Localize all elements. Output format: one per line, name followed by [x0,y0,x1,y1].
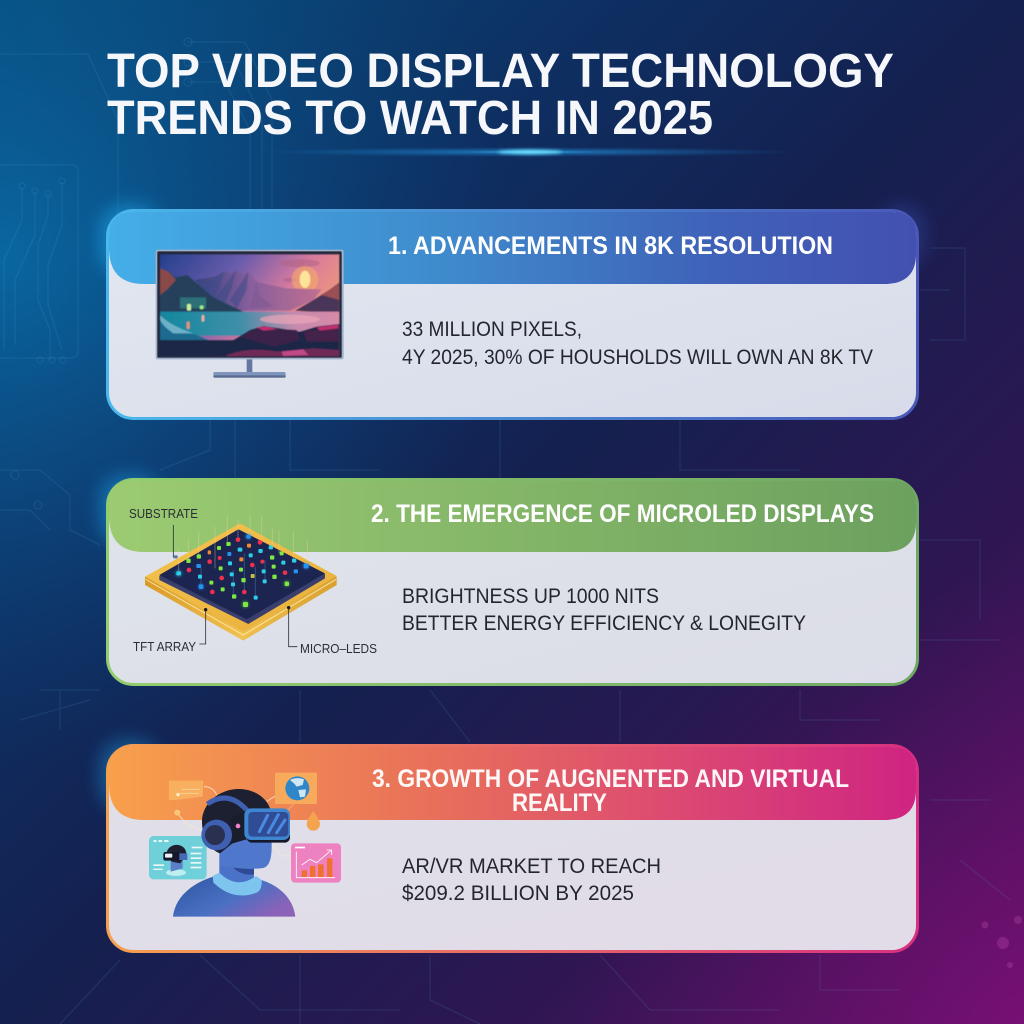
panel header [109,212,916,284]
diagram labels: SUBSTRATE [129,507,198,521]
panel 3: AR and VR [100,740,918,952]
decorative dots bottom right [982,916,1022,968]
body text: BETTER ENERGY EFFICIENCY & LONEGITY [402,611,806,635]
body text: AR/VR MARKET TO REACH [402,854,661,878]
diagram labels [129,507,377,656]
heading [372,765,849,817]
panel body [108,746,918,952]
body text [402,854,661,905]
body text: BRIGHTNESS UP 1000 NITS [402,584,659,608]
title: TOP VIDEO DISPLAY TECHNOLOGY [107,45,894,98]
body text: 4Y 2025, 30% OF HOUSHOLDS WILL OWN AN 8K TV [402,345,874,369]
body text: $209.2 BILLION BY 2025 [402,881,634,905]
panel body [108,210,918,418]
heading: REALITY [512,789,607,817]
title: TRENDS TO WATCH IN 2025 [107,92,713,145]
panel header [109,747,916,820]
heading: 1. ADVANCEMENTS IN 8K RESOLUTION [388,232,833,260]
body text [402,584,806,635]
panel body [108,480,918,684]
panel header [109,481,916,552]
heading: 3. GROWTH OF AUGNENTED AND VIRTUAL [372,765,849,793]
panel 2: MicroLED [100,475,918,684]
body text: 33 MILLION PIXELS, [402,317,582,341]
diagram labels: MICRO–LEDS [300,642,377,656]
panel 1: 8K resolution [100,205,925,418]
title [107,45,894,145]
icon: microLED chip diagram [145,515,337,647]
figure [173,877,295,917]
heading: 2. THE EMERGENCE OF MICROLED DISPLAYS [371,500,874,528]
diagram labels: TFT ARRAY [133,640,197,654]
icon: monitor with landscape [156,250,344,378]
body text [402,317,874,369]
title glow line [260,147,800,157]
callout lines [173,525,297,647]
icon: person wearing VR headset with floating cards [149,773,341,917]
